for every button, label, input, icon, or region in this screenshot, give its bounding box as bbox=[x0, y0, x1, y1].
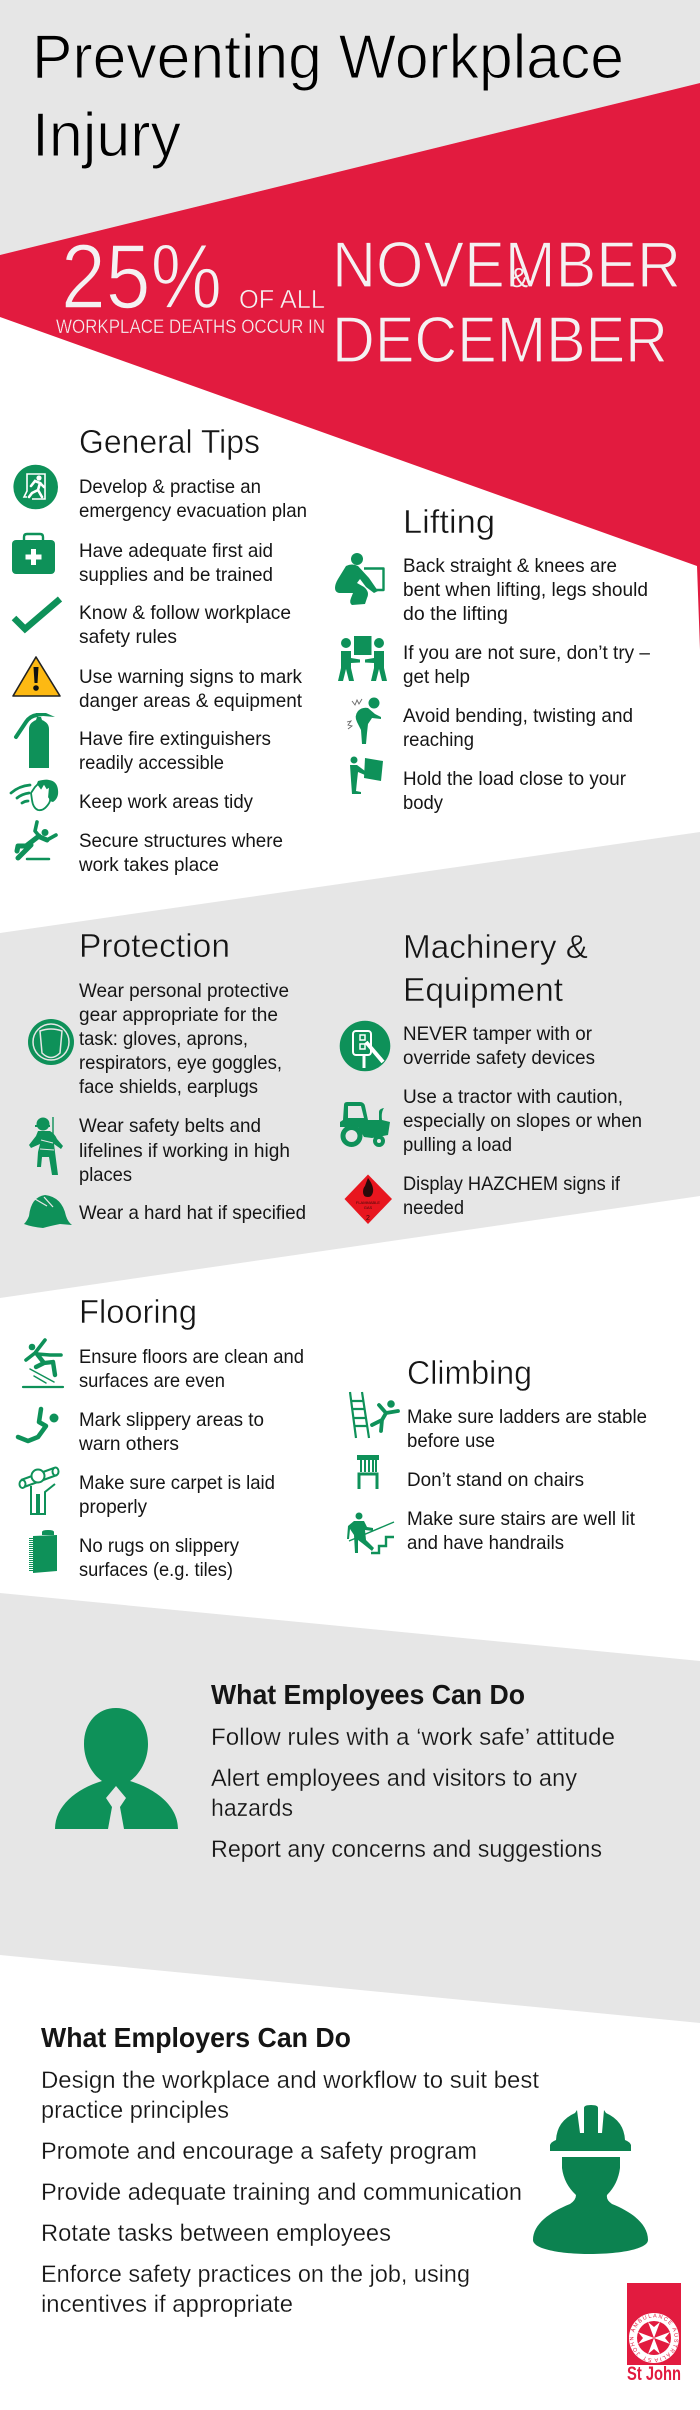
heading: machinery and equipment: Equipment bbox=[403, 971, 563, 1008]
text bbox=[79, 1535, 239, 1581]
text list: hazards bbox=[211, 1795, 293, 1822]
logo: St John bbox=[627, 2283, 681, 2385]
text: warn others bbox=[78, 1433, 179, 1455]
icon: wiping hand bbox=[11, 780, 58, 810]
tip: hazchem bbox=[344, 1173, 621, 1224]
icon: falling person bbox=[17, 822, 56, 859]
text bbox=[78, 1409, 264, 1455]
text: body bbox=[403, 792, 443, 814]
text bbox=[403, 642, 650, 688]
text: gear appropriate for the bbox=[79, 1004, 278, 1026]
tip: safety devices bbox=[340, 1021, 595, 1071]
tip: tractor bbox=[340, 1086, 642, 1156]
text: Wear safety belts and bbox=[79, 1115, 261, 1137]
text: Keep work areas tidy bbox=[79, 791, 253, 813]
icon: person lifting bbox=[335, 553, 384, 605]
tip: safety belts bbox=[29, 1115, 290, 1186]
icon: first aid kit bbox=[12, 534, 55, 574]
heading: machinery and equipment: Machinery & bbox=[403, 928, 588, 965]
statistic callout: OF ALL bbox=[239, 284, 325, 314]
text list: Report any concerns and suggestions bbox=[211, 1836, 602, 1863]
text: Use warning signs to mark bbox=[79, 666, 302, 688]
panel: machinery and equipment bbox=[340, 928, 642, 1224]
text list: Follow rules with a ‘work safe’ attitude bbox=[211, 1724, 615, 1751]
text: surfaces (e.g. tiles) bbox=[79, 1559, 233, 1581]
text: pulling a load bbox=[403, 1134, 512, 1156]
text: danger areas & equipment bbox=[79, 690, 303, 712]
tip: stairs bbox=[347, 1508, 636, 1554]
text: Have fire extinguishers bbox=[79, 728, 271, 750]
statistic callout: 25% bbox=[61, 226, 222, 328]
text list bbox=[211, 1724, 615, 1863]
logo: St John: St John bbox=[627, 2364, 681, 2385]
statistic callout: WORKPLACE DEATHS OCCUR IN bbox=[56, 316, 325, 338]
text: and have handrails bbox=[407, 1532, 564, 1554]
text: Make sure ladders are stable bbox=[407, 1406, 647, 1428]
tip: hard hat bbox=[24, 1195, 306, 1228]
text: readily accessible bbox=[79, 752, 224, 774]
title: Preventing Workplace bbox=[32, 23, 624, 92]
text bbox=[403, 705, 633, 751]
text list: Design the workplace and workflow to suit best bbox=[41, 2067, 539, 2094]
panel: flooring bbox=[18, 1293, 304, 1581]
icon: ear protection bbox=[28, 1019, 74, 1065]
icon: ladder with falling person bbox=[350, 1392, 398, 1438]
text: properly bbox=[79, 1496, 147, 1518]
text list bbox=[41, 2067, 539, 2318]
text list: Alert employees and visitors to any bbox=[211, 1765, 577, 1792]
text bbox=[79, 602, 291, 648]
text: needed bbox=[403, 1197, 464, 1219]
text bbox=[78, 830, 283, 876]
red banner bbox=[0, 83, 700, 650]
text list: incentives if appropriate bbox=[41, 2291, 293, 2318]
text: Know & follow workplace bbox=[79, 602, 291, 624]
text: emergency evacuation plan bbox=[79, 500, 307, 522]
text: Hold the load close to your bbox=[403, 768, 626, 790]
text: respirators, eye goggles, bbox=[79, 1052, 282, 1074]
text bbox=[79, 1115, 290, 1186]
text: Use a tractor with caution, bbox=[403, 1086, 623, 1108]
icon: employee with tie bbox=[55, 1708, 178, 1829]
icon: tractor bbox=[340, 1102, 390, 1145]
text: task: gloves, aprons, bbox=[79, 1028, 248, 1050]
icon: employer in hard hat bbox=[533, 2105, 648, 2254]
statistic callout: NOVEMBER bbox=[332, 228, 681, 301]
icon: flammable hazard diamond bbox=[344, 1174, 392, 1224]
text bbox=[79, 980, 289, 1098]
icon: two people carrying bbox=[338, 636, 387, 681]
panel: what employees can do bbox=[55, 1679, 615, 1863]
text list: Rotate tasks between employees bbox=[41, 2220, 391, 2247]
icon: flammable hazard diamond: FLAMMABLE bbox=[356, 1200, 380, 1205]
title bbox=[32, 23, 624, 170]
text: Back straight & knees are bbox=[403, 555, 617, 577]
text bbox=[79, 476, 307, 522]
tip: hold load close bbox=[350, 756, 626, 814]
text: Make sure carpet is laid bbox=[79, 1472, 275, 1494]
tip: get help bbox=[338, 636, 650, 688]
text: reaching bbox=[403, 729, 474, 751]
text list: Enforce safety practices on the job, using bbox=[41, 2261, 470, 2288]
tip: first aid bbox=[12, 534, 273, 586]
icon: person fallen backwards bbox=[18, 1409, 58, 1441]
tip: ladders bbox=[350, 1392, 647, 1452]
text: Mark slippery areas to bbox=[79, 1409, 264, 1431]
icon: emergency exit bbox=[13, 465, 58, 509]
tip: bend knees bbox=[335, 553, 648, 625]
heading: general tips: General Tips bbox=[79, 423, 260, 460]
icon: back pain bbox=[347, 698, 381, 744]
text: Ensure floors are clean and bbox=[79, 1346, 304, 1368]
icon: chair bbox=[357, 1455, 379, 1489]
text bbox=[403, 768, 626, 814]
heading: lifting: Lifting bbox=[403, 503, 495, 540]
tip: warning signs bbox=[13, 657, 303, 712]
text list: Provide adequate training and communication bbox=[41, 2179, 522, 2206]
tip: secure structures bbox=[17, 822, 283, 876]
text: Develop & practise an bbox=[79, 476, 261, 498]
text: override safety devices bbox=[403, 1047, 595, 1069]
logo: St John: ST JOHN AMBULANCE AUSTRALIA bbox=[630, 2314, 678, 2362]
heading: machinery and equipment bbox=[403, 928, 588, 1008]
heading: flooring: Flooring bbox=[79, 1293, 197, 1330]
statistic callout: DECEMBER bbox=[332, 303, 668, 376]
icon: safety device bbox=[340, 1021, 390, 1071]
icon: slipping person bbox=[23, 1340, 63, 1387]
icon: warning triangle bbox=[13, 657, 60, 696]
heading: what employees can do: What Employees Can Do bbox=[211, 1679, 525, 1710]
text: before use bbox=[407, 1430, 495, 1452]
icon: hard hat bbox=[24, 1195, 72, 1228]
heading: protection: Protection bbox=[79, 927, 230, 964]
panel: climbing bbox=[347, 1354, 647, 1554]
header grey background bbox=[0, 0, 700, 255]
icon: fire extinguisher bbox=[16, 713, 55, 768]
text bbox=[79, 540, 273, 586]
panel: general tips bbox=[11, 423, 307, 876]
panel: what employers can do bbox=[41, 2022, 648, 2318]
tip: safety rules bbox=[14, 599, 291, 648]
text: If you are not sure, don’t try – bbox=[403, 642, 650, 664]
grey band: employees bbox=[0, 1593, 700, 2023]
text list: Promote and encourage a safety program bbox=[41, 2138, 477, 2165]
text: Don’t stand on chairs bbox=[407, 1469, 584, 1491]
icon: check mark bbox=[14, 599, 60, 629]
text: places bbox=[79, 1164, 132, 1186]
text bbox=[79, 728, 271, 774]
heading: climbing: Climbing bbox=[407, 1354, 532, 1391]
text: Have adequate first aid bbox=[79, 540, 273, 562]
text: No rugs on slippery bbox=[79, 1535, 239, 1557]
text list: practice principles bbox=[41, 2097, 229, 2124]
text: Secure structures where bbox=[79, 830, 283, 852]
text: safety rules bbox=[79, 626, 177, 648]
text: surfaces are even bbox=[79, 1370, 225, 1392]
text: bent when lifting, legs should bbox=[403, 579, 648, 601]
tip: rugs bbox=[31, 1530, 239, 1581]
text: Wear personal protective bbox=[79, 980, 289, 1002]
text: lifelines if working in high bbox=[79, 1140, 290, 1162]
text: Wear a hard hat if specified bbox=[79, 1202, 306, 1224]
tip: extinguishers bbox=[16, 713, 271, 774]
icon: flammable hazard diamond: GAS bbox=[364, 1205, 373, 1210]
text: Display HAZCHEM signs if bbox=[403, 1173, 621, 1195]
text: face shields, earplugs bbox=[79, 1076, 258, 1098]
text: get help bbox=[403, 666, 470, 688]
text: NEVER tamper with or bbox=[403, 1023, 592, 1045]
tip: clean floors bbox=[23, 1340, 304, 1392]
text bbox=[79, 1346, 304, 1392]
statistic callout bbox=[56, 226, 681, 376]
text: supplies and be trained bbox=[79, 564, 273, 586]
icon: person carrying carpet bbox=[20, 1468, 58, 1514]
text bbox=[403, 1023, 595, 1069]
tip: tidy bbox=[11, 780, 253, 813]
text bbox=[79, 1472, 275, 1518]
tip: slippery areas bbox=[18, 1409, 264, 1455]
tip: evacuation plan bbox=[13, 465, 307, 522]
text bbox=[79, 666, 303, 712]
text: especially on slopes or when bbox=[403, 1110, 642, 1132]
tip: protective gear bbox=[28, 980, 289, 1098]
icon: person holding box bbox=[350, 756, 383, 794]
text: work takes place bbox=[78, 854, 219, 876]
icon: person on stairs with handrail bbox=[347, 1512, 394, 1553]
text bbox=[403, 1173, 621, 1219]
text: Make sure stairs are well lit bbox=[407, 1508, 636, 1530]
icon: flammable hazard diamond: 2 bbox=[366, 1215, 370, 1222]
panel: lifting bbox=[335, 503, 650, 814]
text bbox=[403, 555, 648, 625]
statistic callout: & bbox=[510, 262, 528, 293]
icon: rug bbox=[31, 1530, 57, 1573]
icon: person in harness bbox=[29, 1117, 63, 1175]
text bbox=[403, 1086, 642, 1156]
grey band: protection and machinery bbox=[0, 832, 700, 1298]
text: Avoid bending, twisting and bbox=[403, 705, 633, 727]
text bbox=[407, 1508, 636, 1554]
tip: carpet bbox=[20, 1468, 275, 1518]
tip: chairs bbox=[357, 1455, 584, 1491]
panel: protection bbox=[24, 927, 306, 1228]
text bbox=[407, 1406, 647, 1452]
title: Injury bbox=[32, 101, 181, 170]
tip: avoid bending bbox=[347, 698, 633, 751]
text: do the lifting bbox=[403, 603, 508, 625]
heading: what employers can do: What Employers Can Do bbox=[41, 2022, 351, 2053]
